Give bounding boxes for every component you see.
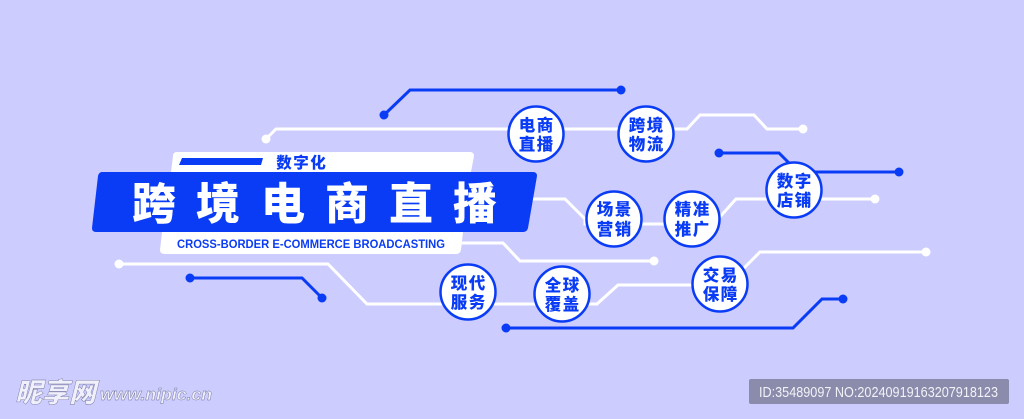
English subtitle: CROSS-BORDER E-COMMERCE BROADCASTING — [177, 239, 445, 251]
node: 全球覆盖: 覆盖 — [545, 294, 579, 314]
node: 数字店铺: 店铺 — [777, 190, 811, 210]
subtitle: 数字化 — [276, 153, 326, 172]
node: 场景营销: 场景 — [597, 200, 631, 219]
circuit lines: white — [114, 115, 930, 304]
circuit lines: blue — [186, 86, 904, 332]
title banner — [92, 172, 537, 232]
node: 全球覆盖 — [534, 266, 590, 322]
node: 数字店铺: 数字 — [777, 171, 811, 191]
node: 场景营销: 营销 — [597, 219, 632, 239]
top white tab with subtitle — [171, 152, 474, 172]
bottom white tab with English subtitle — [160, 232, 463, 254]
node: 交易保障: 交易 — [703, 265, 737, 285]
watermark logo — [15, 378, 212, 408]
node: 现代服务 — [440, 264, 496, 320]
node: 交易保障 — [692, 256, 748, 312]
node: 精准推广: 推广 — [675, 219, 709, 239]
node: 跨境物流: 跨境 — [629, 115, 663, 135]
decorative blue bar — [179, 158, 263, 165]
node: 跨境物流 — [618, 106, 674, 162]
main title: 跨境电商直播 — [132, 180, 497, 229]
node: 全球覆盖: 全球 — [545, 275, 580, 295]
node: 现代服务: 现代 — [451, 274, 486, 293]
node: 交易保障: 保障 — [703, 284, 737, 304]
watermark url: www.nipic.cn — [100, 385, 212, 404]
watermark logo: 昵享网 — [15, 378, 100, 408]
node: 跨境物流: 物流 — [629, 134, 664, 154]
node: 数字店铺 — [766, 162, 822, 218]
node: 电商直播: 直播 — [519, 134, 554, 154]
node: 精准推广: 精准 — [675, 199, 710, 219]
node: 现代服务: 服务 — [451, 293, 486, 312]
image ID badge — [749, 379, 1009, 404]
node: 精准推广 — [664, 192, 720, 246]
node: 电商直播: 电商 — [519, 115, 553, 135]
node: 场景营销 — [586, 192, 642, 246]
node: 电商直播 — [508, 106, 564, 162]
